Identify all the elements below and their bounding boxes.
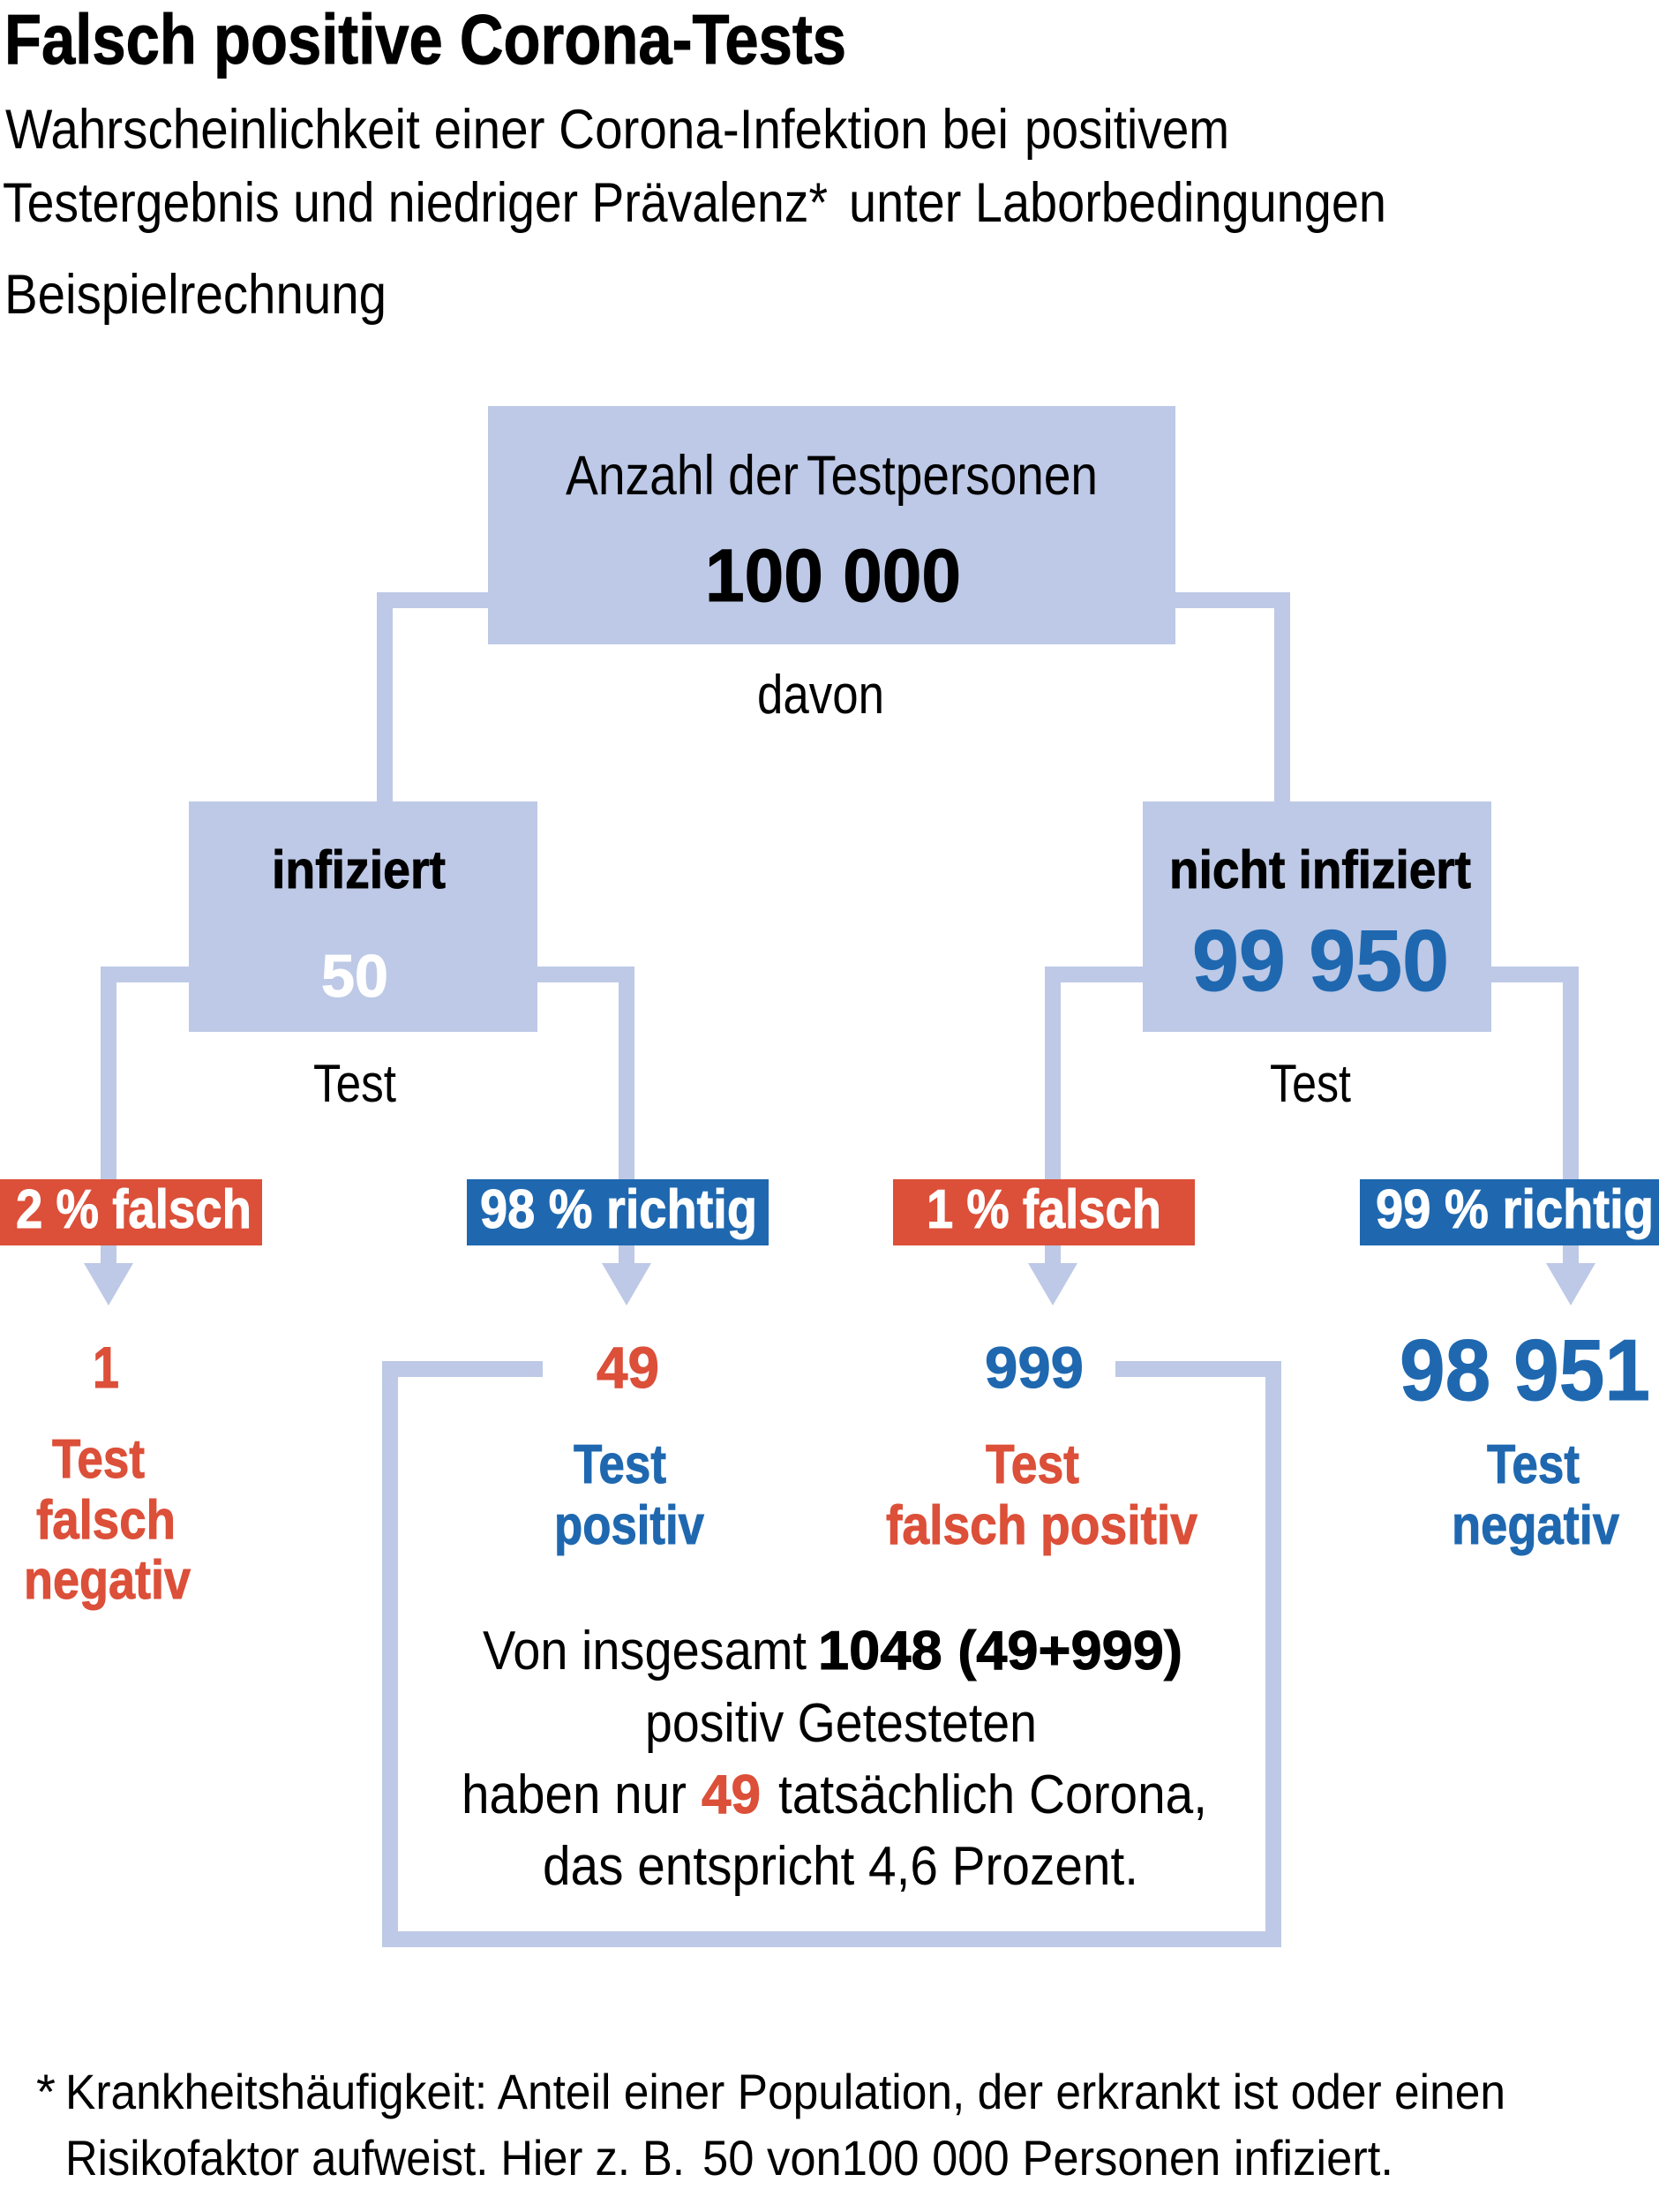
box: not infected: nicht infiziert (1169, 840, 1471, 899)
subtitle: positivem (1025, 99, 1229, 161)
box: infected (189, 801, 537, 1032)
result: 49 test positive: 49 (597, 1335, 659, 1400)
result: 1 false negative: 1 (93, 1335, 119, 1400)
summary text: Von insgesamt (483, 1621, 807, 1682)
summary text: positiv Getesteten (645, 1693, 1037, 1754)
connector and arrow: infected, false (84, 974, 189, 1305)
tag: 2 % falsch: 2 % falsch (16, 1179, 251, 1240)
box: total test persons: Testpersonen (807, 445, 1098, 507)
box: total test persons: Anzahl der (566, 445, 799, 507)
result: 49 test positive: Test (574, 1434, 666, 1495)
box: infected: infiziert (272, 840, 446, 899)
result: 999 false positive: Test (986, 1434, 1079, 1495)
footnote: 50 von100 000 Personen infiziert. (702, 2130, 1393, 2186)
summary text: 49 (702, 1764, 761, 1825)
subtitle: unter Laborbedingungen (849, 172, 1386, 234)
label: davon: davon (757, 665, 884, 726)
result: 98 951 test negative: negativ (1452, 1495, 1619, 1556)
label: test, left: Test (313, 1054, 396, 1113)
label: test, right: Test (1270, 1054, 1351, 1113)
result: 1 false negative: falsch (36, 1490, 176, 1551)
box: not infected (1143, 801, 1491, 1032)
result: 98 951 test negative: 98 951 (1400, 1321, 1650, 1418)
result: 1 false negative (24, 1335, 191, 1611)
footnote: * (36, 2064, 56, 2119)
tag: 98 % richtig: 98 % richtig (480, 1179, 757, 1240)
footnote: Krankheitshäufigkeit: Anteil einer Population, der erkrankt ist oder einen (65, 2064, 1505, 2119)
result: 999 false positive: 999 (985, 1335, 1084, 1400)
summary frame (390, 1369, 1273, 1939)
tag: 1 % falsch: 1 % falsch (927, 1179, 1161, 1240)
summary text: tatsächlich Corona, (778, 1764, 1207, 1825)
result: 1 false negative: negativ (24, 1550, 191, 1611)
connector: top box to branches (385, 600, 1282, 809)
connector and arrow: infected, correct (537, 974, 651, 1305)
result: 98 951 test negative: Test (1487, 1434, 1580, 1495)
result: 999 false positive (886, 1335, 1197, 1556)
box: total test persons (488, 406, 1175, 644)
result: 999 false positive: falsch positiv (886, 1495, 1197, 1556)
box: total test persons: 100 000 (705, 534, 961, 617)
box: not infected: 99 950 (1192, 912, 1449, 1009)
subtitle (3, 99, 1386, 234)
footnote: Risikofaktor aufweist. Hier z. B. (65, 2130, 685, 2186)
box: infected: 50 (321, 943, 388, 1010)
result: 49 test positive (554, 1335, 704, 1556)
connector and arrow: not infected, false (1028, 974, 1143, 1305)
example label: Beispielrechnung (4, 264, 387, 326)
summary text: das entspricht 4,6 Prozent. (543, 1836, 1138, 1897)
summary text (462, 1621, 1207, 1897)
result: 1 false negative: Test (52, 1429, 145, 1490)
summary text: haben nur (462, 1764, 687, 1825)
result: 98 951 test negative (1400, 1321, 1650, 1556)
connector and arrow: not infected, correct (1491, 974, 1595, 1305)
result: 49 test positive: positiv (554, 1495, 704, 1556)
subtitle: Wahrscheinlichkeit einer Corona-Infektion bei (5, 99, 1009, 161)
subtitle: Testergebnis und niedriger Prävalenz* (3, 172, 828, 234)
title: Falsch positive Corona-Tests (4, 0, 846, 79)
summary text: 1048 (49+999) (818, 1621, 1182, 1682)
footnote (36, 2064, 1505, 2186)
